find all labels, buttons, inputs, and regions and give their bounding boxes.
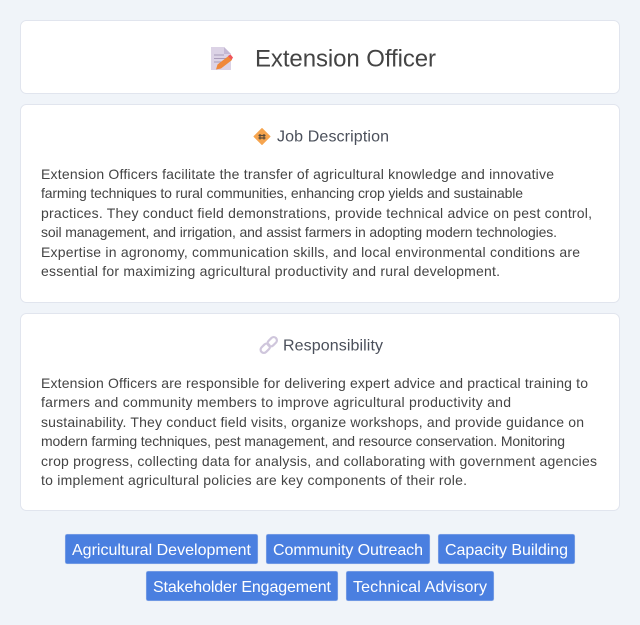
title: Extension Officer — [255, 46, 436, 72]
text block: responsibility: to implement agricultural policies are key components of their role. — [41, 472, 467, 488]
icon: document with pencil — [211, 47, 233, 70]
tag: stakeholder engagement: Stakeholder Engagement — [153, 579, 332, 596]
text block: job description — [41, 166, 592, 279]
tag: agricultural development: Agricultural Development — [72, 542, 252, 559]
text block: responsibility: sustainability. They conduct field visits, organize workshops, and provide guidance on — [41, 414, 584, 430]
text block: responsibility: farmers and community members to improve agricultural productivity and — [41, 394, 511, 410]
tag: technical advisory: Technical Advisory — [353, 579, 487, 596]
heading: responsibility: Responsibility — [283, 338, 383, 354]
tag: capacity building: Capacity Building — [445, 542, 568, 559]
heading: job description: Job Description — [277, 128, 389, 146]
text block: job description: Extension Officers facilitate the transfer of agricultural knowledge and innovative — [41, 166, 554, 182]
text block: job description: Expertise in agronomy, communication skills, and local environmental conditions are — [41, 244, 580, 260]
panel: responsibility — [20, 314, 620, 510]
tags — [65, 534, 575, 601]
text block: job description: essential for maximizing agricultural productivity and rural development. — [41, 263, 500, 279]
tag: agricultural development — [65, 534, 258, 564]
text block: job description: farming techniques to rural communities, enhancing crop yields and sustainable — [41, 185, 523, 201]
text block: responsibility — [41, 375, 597, 488]
tag: community outreach: Community Outreach — [273, 542, 423, 559]
text block: responsibility: Extension Officers are responsible for delivering expert advice and practical training to — [41, 375, 588, 391]
text block: responsibility: modern farming techniques, pest management, and resource conservation. Monitoring — [41, 433, 565, 449]
text block: job description: soil management, and irrigation, and assist farmers in adopting modern technologies. — [41, 224, 557, 240]
icon: chain link — [259, 336, 278, 354]
icon: road sign diamond — [254, 128, 270, 144]
text block: responsibility: crop progress, collecting data for analysis, and collaborating with government agencies — [41, 453, 597, 469]
tag: community outreach — [266, 534, 430, 564]
tag: technical advisory — [346, 571, 494, 601]
tag: stakeholder engagement — [146, 571, 338, 601]
panel: title card — [20, 20, 620, 94]
panel: job description — [20, 104, 620, 302]
tag: capacity building — [438, 534, 575, 564]
text block: job description: practices. They conduct field demonstrations, provide technical advice on pest control, — [41, 205, 592, 221]
